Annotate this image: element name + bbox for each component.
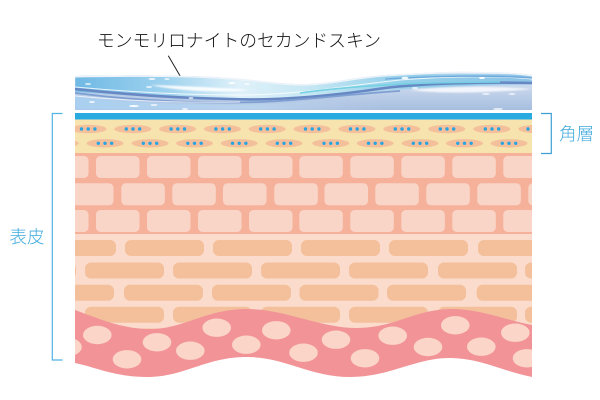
- panel: stratum corneum layer: [75, 113, 532, 153]
- orange brick rows: [75, 240, 532, 329]
- panel: salmon brick layer: [75, 153, 532, 234]
- cells row 1: [70, 125, 555, 133]
- right bracket: stratum corneum: [541, 114, 551, 154]
- blue surface band: [75, 113, 532, 120]
- left bracket: epidermis: [52, 114, 62, 360]
- panel: peach brick layer: [75, 234, 532, 329]
- sparkles: [85, 77, 516, 110]
- panel: pink wavy basal layer: [53, 309, 541, 377]
- round cells: [53, 316, 541, 368]
- brick rows: [75, 156, 532, 232]
- leader line: [168, 56, 188, 90]
- label: stratum corneum: 角層: [559, 124, 594, 144]
- panel: water film second skin: [75, 70, 532, 110]
- blue dots: [80, 127, 530, 145]
- title: モンモリロナイトのセカンドスキン: [97, 31, 381, 51]
- yellow band: [75, 120, 532, 153]
- label: epidermis: 表皮: [10, 227, 44, 247]
- cells row 2: [42, 139, 527, 148]
